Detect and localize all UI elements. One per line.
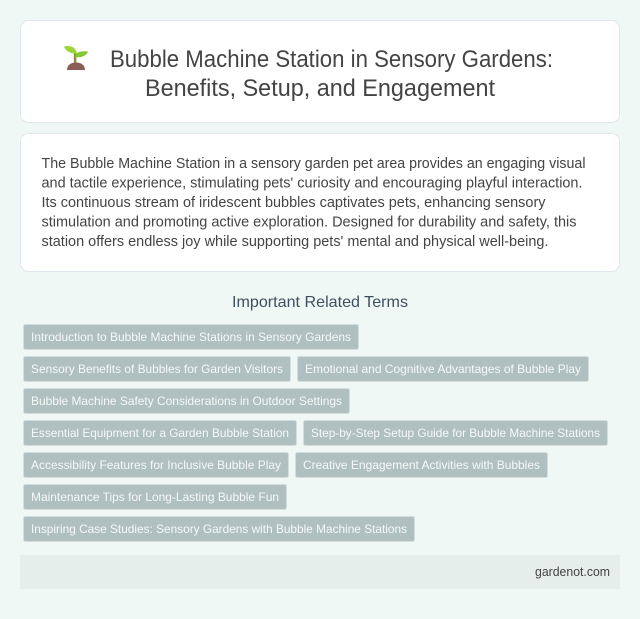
title (110, 46, 553, 102)
tag (298, 356, 588, 382)
panel: title card (20, 20, 620, 122)
tag (24, 356, 290, 382)
description text: Its continuous stream of iridescent bubbles captivates pets, enhancing sensory (42, 195, 546, 211)
title: Benefits, Setup, and Engagement (145, 75, 495, 102)
tag: Accessibility Features for Inclusive Bubble Play (31, 458, 281, 472)
footer source: gardenot.com (535, 565, 610, 579)
tag (24, 484, 286, 510)
description text: and tactile experience, stimulating pets' curiosity and encouraging playful interaction. (42, 176, 582, 192)
tag: Bubble Machine Safety Considerations in Outdoor Settings (31, 394, 342, 408)
icon: seedling (64, 46, 88, 70)
tag (24, 516, 414, 542)
tag: Introduction to Bubble Machine Stations in Sensory Gardens (31, 330, 351, 344)
tag group (24, 324, 608, 542)
tag: Sensory Benefits of Bubbles for Garden Visitors (31, 362, 283, 376)
tag (24, 452, 288, 478)
tag (296, 452, 548, 478)
tag: Step-by-Step Setup Guide for Bubble Machine Stations (311, 426, 600, 440)
description text: stimulation and promoting active exploration. Designed for durability and safety, this (42, 214, 576, 230)
footer (20, 555, 620, 589)
heading: related terms: Important Related Terms (232, 294, 408, 311)
tag: Maintenance Tips for Long-Lasting Bubble Fun (31, 490, 279, 504)
title: Bubble Machine Station in Sensory Gardens: (110, 46, 553, 73)
tag (24, 420, 296, 446)
tag: Essential Equipment for a Garden Bubble Station (31, 426, 289, 440)
tag (24, 324, 358, 350)
tag: Emotional and Cognitive Advantages of Bubble Play (305, 362, 581, 376)
description text: station offers endless joy while supporting pets' mental and physical well-being. (42, 234, 548, 250)
description text (42, 156, 586, 250)
tag: Creative Engagement Activities with Bubbles (303, 458, 540, 472)
tag: Inspiring Case Studies: Sensory Gardens with Bubble Machine Stations (31, 522, 407, 536)
tag (304, 420, 608, 446)
tag (24, 388, 350, 414)
description text: The Bubble Machine Station in a sensory garden pet area provides an engaging visual (42, 156, 586, 172)
panel: description (20, 134, 620, 272)
